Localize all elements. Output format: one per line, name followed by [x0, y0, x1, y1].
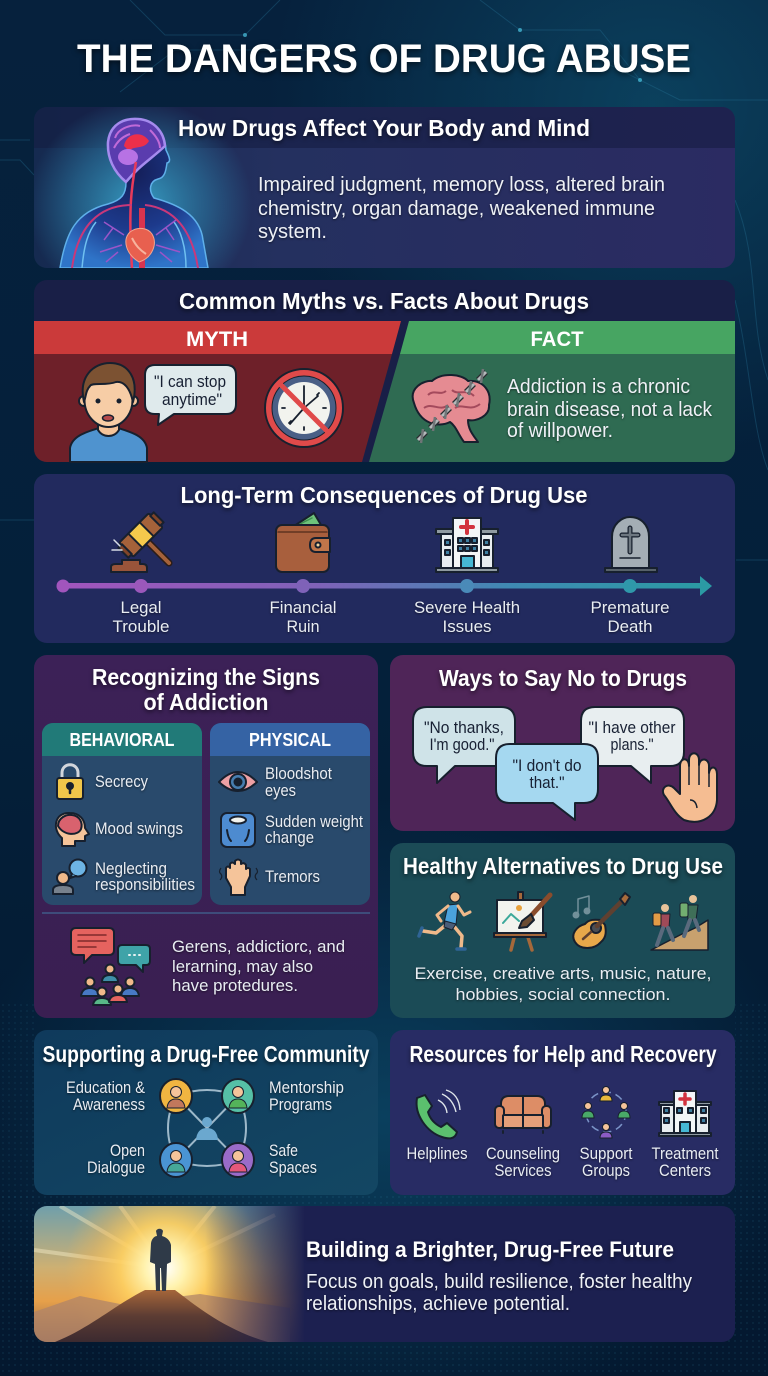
body text: Focus on goals, build resilience, foster healthy — [306, 1271, 692, 1293]
timeline arrow — [56, 576, 712, 596]
icon: head with brain — [56, 813, 89, 846]
icon: couch — [495, 1096, 551, 1133]
speech bubble: i don't do that: "I don't do — [512, 756, 582, 775]
speech bubble: no thanks — [413, 707, 515, 783]
panel: recognizing the signs of addiction: Recognizing the Signs — [92, 664, 320, 690]
note text: Gerens, addictiorc, and — [172, 937, 345, 956]
panel: myths vs facts: Common Myths vs. Facts About Drugs — [179, 288, 589, 314]
speech bubble: i can stop anytime: "I can stop — [154, 372, 226, 391]
resource labels: Support — [580, 1144, 633, 1163]
illustration: person on a mountain at sunrise — [34, 1206, 301, 1342]
panel: how drugs affect your body and mind — [34, 107, 735, 268]
icon: guitar and note — [573, 893, 630, 948]
panel: resources for help and recovery — [390, 1030, 735, 1195]
card: behavioral: Mood swings — [95, 819, 183, 838]
icon: person with chat bubble — [53, 860, 86, 894]
resource labels: Groups — [582, 1161, 630, 1180]
panel: building a brighter future — [34, 1206, 735, 1342]
resource labels: Centers — [659, 1161, 711, 1180]
speech bubble: other plans: "I have other — [588, 718, 676, 737]
panel: recognizing the signs of addiction — [34, 655, 378, 1018]
icon: hikers on a hill — [651, 895, 708, 950]
speech bubble: i don't do that: that." — [530, 773, 564, 792]
body text: chemistry, organ damage, weakened immune — [258, 198, 655, 220]
diagram labels: Awareness — [73, 1095, 145, 1114]
diagram labels — [66, 1078, 344, 1177]
timeline labels: Issues — [442, 617, 492, 636]
icon: group conversation — [71, 928, 150, 1005]
icon: stop hand — [663, 753, 717, 822]
icon: phone — [417, 1090, 460, 1138]
panel: building a brighter future: Building a Brighter, Drug-Free Future — [306, 1237, 674, 1262]
title: THE DANGERS OF DRUG ABUSE — [77, 37, 691, 81]
card: physical: change — [265, 828, 314, 847]
myth side — [34, 321, 401, 462]
body text — [306, 1271, 692, 1315]
diagram labels: Open — [110, 1141, 145, 1160]
icon: padlock — [57, 765, 83, 799]
card: physical: Sudden weight — [265, 812, 363, 831]
diagram labels: Dialogue — [87, 1158, 145, 1177]
body text: Impaired judgment, memory loss, altered brain — [258, 174, 665, 196]
diagram labels: Programs — [269, 1095, 332, 1114]
panel: healthy alternatives: Healthy Alternatives to Drug Use — [403, 853, 723, 879]
diagram labels: Safe — [269, 1141, 298, 1160]
fact side: FACT — [530, 328, 584, 351]
timeline labels — [112, 598, 670, 636]
fact text — [507, 376, 713, 442]
note text — [172, 937, 345, 995]
icon: support group circle — [582, 1086, 630, 1138]
body text: relationships, achieve potential. — [306, 1293, 570, 1315]
card: physical: eyes — [265, 781, 296, 800]
icon: easel with paintbrush — [494, 892, 550, 950]
diagram labels: Mentorship — [269, 1078, 344, 1097]
panel: resources for help and recovery: Resources for Help and Recovery — [410, 1041, 717, 1067]
panel: recognizing the signs of addiction: of Addiction — [144, 689, 268, 715]
myth side: MYTH — [186, 328, 248, 351]
card: physical: PHYSICAL — [249, 730, 331, 750]
icon: gavel — [111, 510, 169, 572]
timeline labels: Ruin — [286, 617, 320, 636]
panel: supporting a drug-free community: Supporting a Drug-Free Community — [42, 1041, 370, 1067]
resource labels — [406, 1144, 719, 1180]
icon: gravestone — [605, 517, 657, 572]
icon: runner — [419, 892, 470, 949]
body text — [258, 174, 665, 243]
card: behavioral: Neglecting — [95, 859, 167, 878]
icon: weight scale — [221, 813, 255, 847]
icon: crossed-out clock — [265, 369, 343, 447]
fact text: brain disease, not a lack — [507, 399, 713, 421]
panel: how drugs affect your body and mind: How Drugs Affect Your Body and Mind — [178, 115, 590, 141]
speech bubble: no thanks: I'm good." — [430, 735, 494, 754]
resource labels: Services — [494, 1161, 552, 1180]
diagram labels: Education & — [66, 1078, 146, 1097]
card: physical: Bloodshot — [265, 764, 332, 783]
speech bubble: i can stop anytime: anytime" — [162, 390, 222, 409]
panel: long-term consequences: Long-Term Consequences of Drug Use — [180, 482, 588, 508]
icon: trembling hand — [220, 860, 258, 895]
resource labels: Treatment — [652, 1144, 719, 1163]
card: behavioral: responsibilities — [95, 875, 195, 894]
timeline labels: Severe Health — [414, 598, 520, 617]
timeline labels: Death — [608, 617, 652, 636]
icon: wallet — [276, 513, 330, 572]
speech bubble: no thanks: "No thanks, — [424, 718, 504, 737]
fact text: Addiction is a chronic — [507, 376, 690, 398]
panel: supporting a drug-free community — [34, 1030, 378, 1195]
card: behavioral — [42, 723, 202, 905]
speech bubble: other plans: plans." — [610, 735, 654, 754]
body text: Exercise, creative arts, music, nature, — [414, 964, 712, 983]
icon: treatment center — [659, 1091, 711, 1136]
card: behavioral: Secrecy — [95, 772, 148, 791]
fact text: of willpower. — [507, 420, 613, 442]
note text: have protedures. — [172, 976, 298, 995]
icon: hospital — [436, 518, 498, 572]
card: physical: Tremors — [265, 867, 320, 886]
resource labels: Counseling — [486, 1144, 560, 1163]
speech bubble: i can stop anytime — [145, 365, 236, 425]
timeline labels: Premature — [590, 598, 670, 617]
speech bubble: other plans — [581, 707, 684, 783]
timeline labels: Legal — [120, 598, 162, 617]
card: physical — [210, 723, 370, 905]
icon: brain in chains — [413, 369, 490, 443]
panel: healthy alternatives — [390, 843, 735, 1018]
fact side — [369, 321, 735, 462]
diagram labels: Spaces — [269, 1158, 317, 1177]
body text — [414, 964, 712, 1004]
resource labels: Helplines — [406, 1144, 468, 1163]
panel: ways to say no — [390, 655, 735, 831]
timeline labels: Financial — [270, 598, 336, 617]
icon: worried person — [70, 363, 147, 462]
speech bubble: i don't do that — [496, 744, 598, 820]
panel: myths vs facts — [34, 280, 735, 462]
panel: ways to say no: Ways to Say No to Drugs — [439, 665, 687, 691]
note text: lerarning, may also — [172, 957, 313, 976]
icon: human body with brain and heart — [36, 107, 244, 268]
card: behavioral: BEHAVIORAL — [70, 730, 175, 750]
body text: system. — [258, 221, 327, 243]
body text: hobbies, social connection. — [456, 985, 670, 1004]
timeline labels: Trouble — [112, 617, 170, 636]
panel: long-term consequences — [34, 474, 735, 643]
icon: bloodshot eye — [219, 772, 257, 791]
diagram: community network — [160, 1079, 254, 1177]
